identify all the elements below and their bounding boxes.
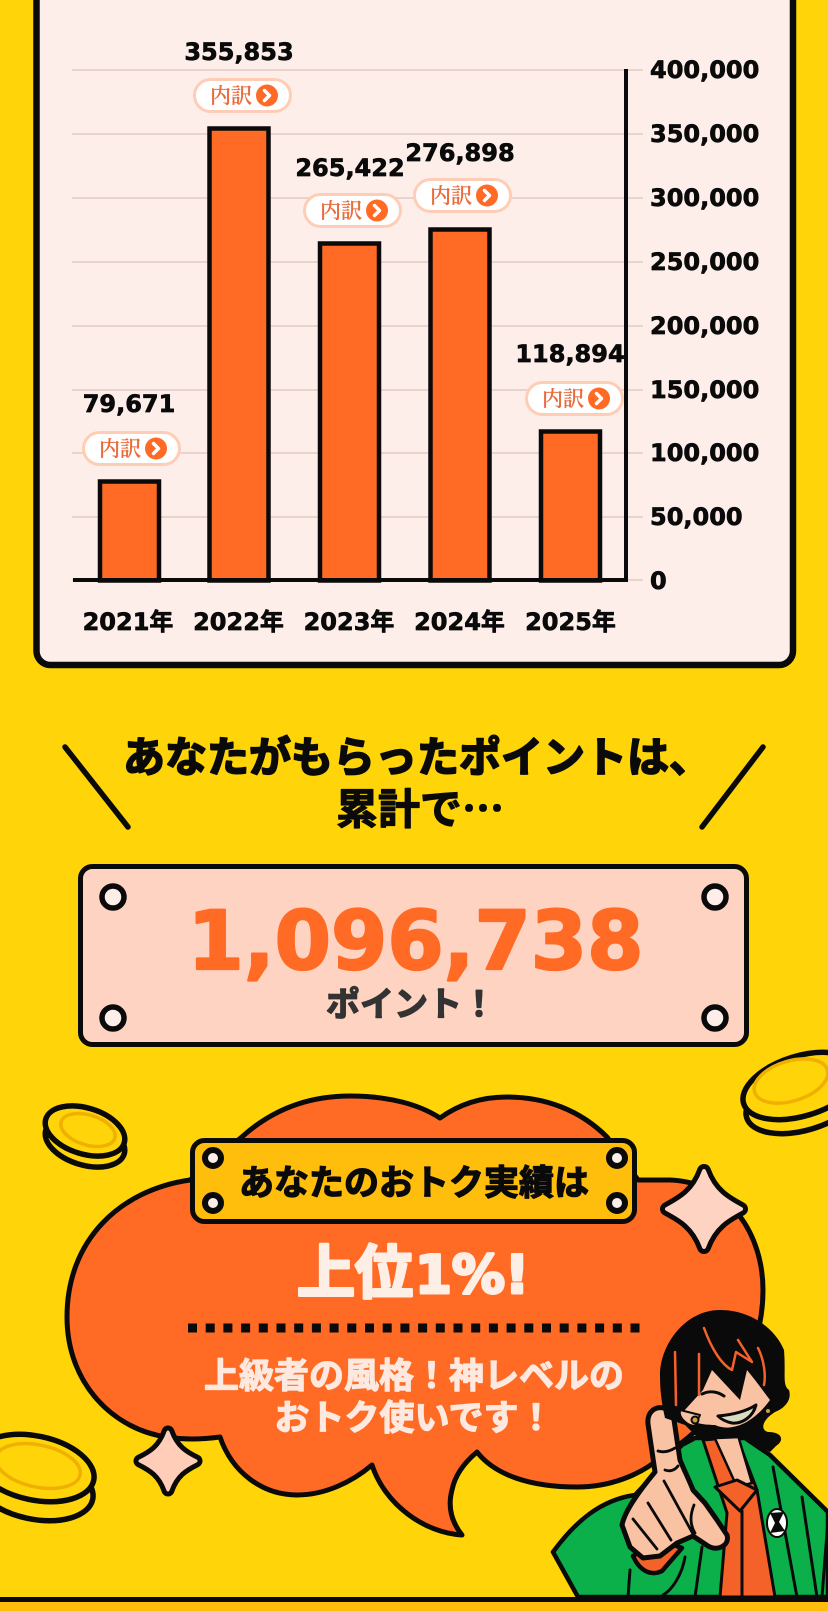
unit label: ポイント！ — [326, 977, 496, 1026]
icon: sparkle right — [667, 1171, 741, 1247]
chart axes — [73, 69, 626, 580]
breakdown button: 2022 — [194, 80, 290, 112]
label plate: track record — [192, 1140, 634, 1222]
heading: total points — [123, 724, 711, 837]
panel: total points plate — [80, 866, 746, 1044]
value labels: 276,898 — [405, 139, 515, 167]
breakdown button: 2025: 内訳 — [542, 383, 584, 413]
x axis labels: 2025年 — [525, 608, 616, 636]
speech bubble — [67, 1096, 763, 1535]
y axis labels: 150,000 — [650, 376, 759, 404]
label rivets — [205, 1150, 625, 1211]
panel: yearly points chart — [36, 0, 793, 665]
closed eye — [702, 1392, 724, 1396]
face — [683, 1370, 770, 1428]
y axis labels: 250,000 — [650, 248, 759, 276]
bar chart — [73, 69, 626, 580]
hair streaks — [675, 1328, 765, 1405]
rank result: 上位 — [297, 1226, 413, 1310]
emphasis lines — [65, 747, 763, 827]
breakdown button: 2021: 内訳 — [99, 433, 141, 463]
breakdown button: 2023 — [304, 194, 400, 226]
breakdown button: 2023: 内訳 — [320, 195, 362, 225]
x axis labels — [83, 608, 616, 636]
breakdown button: 2025 — [526, 382, 622, 414]
x axis labels: 2021年 — [83, 608, 173, 636]
y axis labels: 0 — [650, 567, 667, 595]
y axis labels: 300,000 — [650, 184, 759, 212]
collar — [715, 1480, 757, 1511]
bar: 2021 — [100, 482, 159, 580]
breakdown button: 2021 — [84, 432, 180, 464]
y axis labels: 50,000 — [650, 503, 743, 531]
value labels — [83, 38, 625, 418]
breakdown button: 2022: 内訳 — [210, 80, 252, 110]
badge — [767, 1509, 787, 1537]
bar: 2025 — [541, 432, 600, 580]
value labels: 355,853 — [184, 38, 294, 66]
neck — [712, 1432, 752, 1487]
robe — [553, 1438, 828, 1597]
dotted divider — [188, 1324, 644, 1332]
rank result: 1%! — [415, 1245, 529, 1306]
bar: 2022 — [210, 128, 268, 580]
y axis labels — [650, 56, 759, 595]
total value: 1,096,738 — [187, 895, 644, 989]
character illustration — [553, 1310, 828, 1597]
icon: coin top left — [39, 1097, 131, 1176]
breakdown button: 2024 — [414, 180, 510, 212]
icon: sparkle left — [140, 1432, 196, 1490]
hand — [622, 1408, 727, 1558]
cuff — [633, 1540, 682, 1573]
heading: total points: 累計で… — [336, 776, 504, 837]
value labels: 79,671 — [83, 390, 175, 418]
rank message: おトク使いです！ — [275, 1390, 553, 1441]
finger lines — [633, 1448, 695, 1549]
footer stripe — [0, 1597, 828, 1611]
icon: coin top right — [735, 1040, 828, 1146]
rank message — [204, 1348, 624, 1441]
earrings — [692, 1408, 771, 1424]
label text: あなたのおトク実績は — [239, 1155, 589, 1206]
bar: 2024 — [430, 230, 490, 580]
value labels: 118,894 — [515, 340, 625, 368]
x axis labels: 2022年 — [193, 608, 284, 636]
x axis labels: 2024年 — [414, 608, 505, 636]
x axis labels: 2023年 — [304, 608, 394, 636]
y axis labels: 100,000 — [650, 439, 759, 467]
value labels: 265,422 — [295, 154, 405, 182]
plate rivets — [102, 886, 726, 1029]
hair back — [660, 1310, 790, 1452]
teeth — [718, 1405, 756, 1423]
breakdown button: 2024: 内訳 — [430, 180, 472, 210]
robe lines — [628, 1467, 828, 1597]
y axis labels: 350,000 — [650, 120, 759, 148]
bar: 2023 — [320, 244, 379, 580]
ear — [680, 1410, 700, 1426]
y axis labels: 200,000 — [650, 312, 759, 340]
rank message: 上級者の風格！神レベルの — [204, 1348, 624, 1399]
heading: total points: あなたがもらったポイントは、 — [123, 724, 711, 785]
icon: coin bottom left — [0, 1424, 100, 1531]
shirt — [703, 1437, 775, 1597]
y axis labels: 400,000 — [650, 56, 759, 84]
